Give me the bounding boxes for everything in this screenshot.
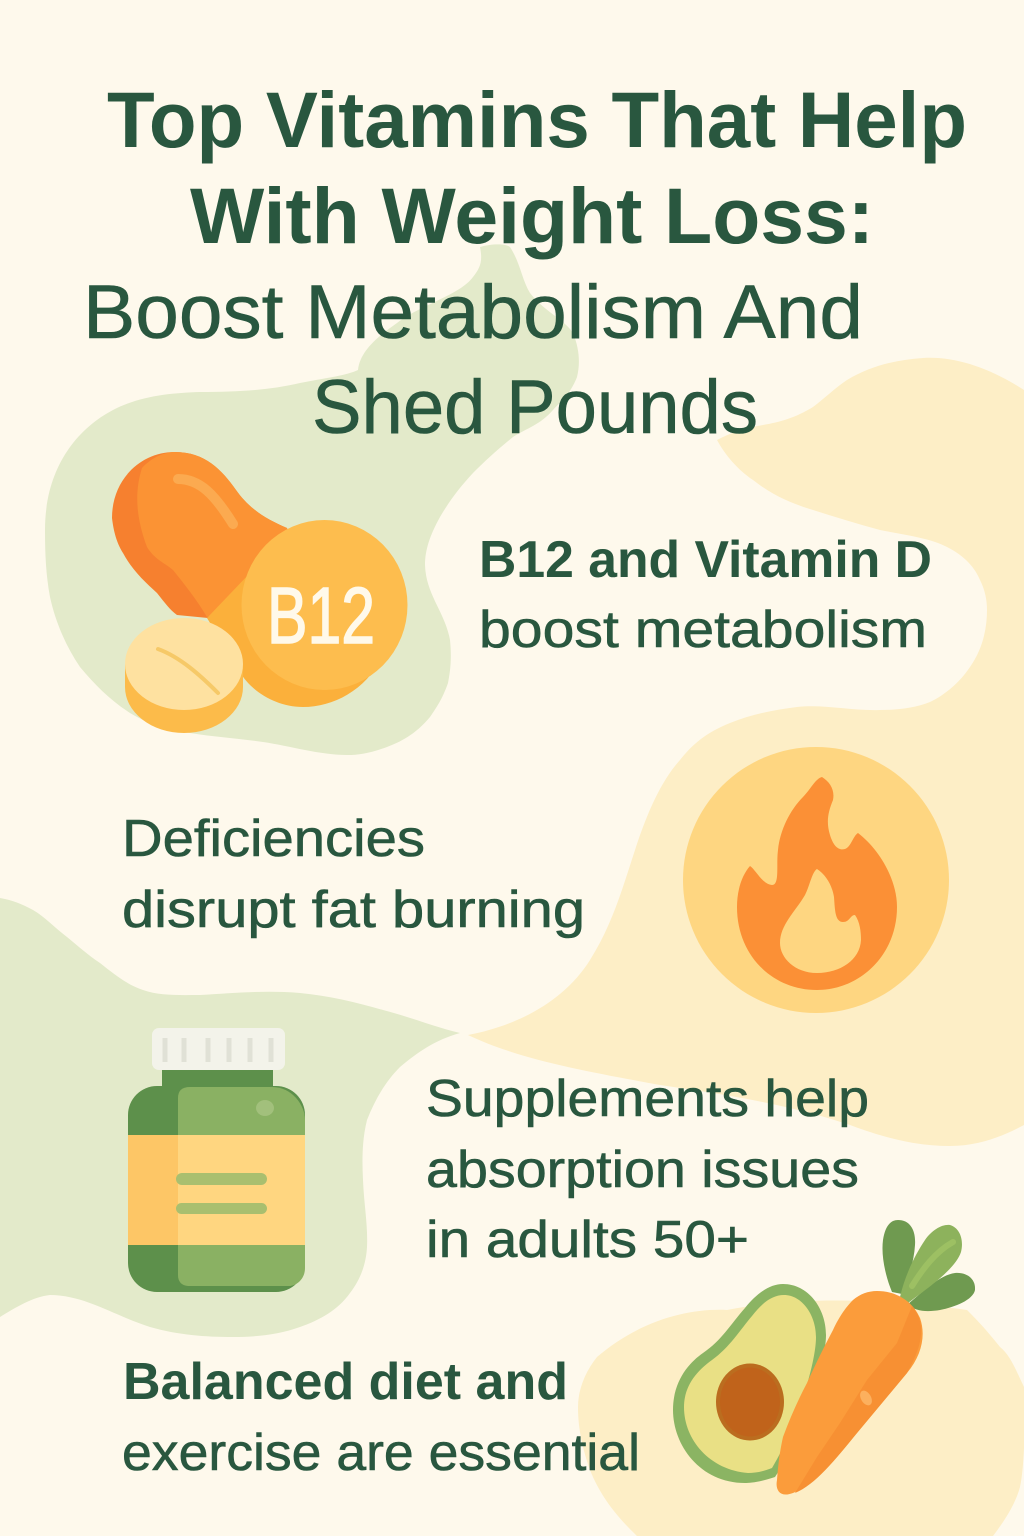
title	[83, 75, 967, 450]
B12 tablet	[207, 520, 408, 707]
carrot leaves	[882, 1220, 975, 1311]
text: balanced diet: Balanced diet and	[123, 1353, 568, 1411]
text: supplements: in adults 50+	[426, 1211, 749, 1269]
icon: carrot	[777, 1220, 975, 1495]
text: b12 and vitamin d: boost metabolism	[479, 601, 927, 659]
title: Top Vitamins That Help	[107, 75, 967, 164]
text: supplements: absorption issues	[426, 1141, 859, 1199]
text: balanced diet: exercise are essential	[122, 1424, 640, 1482]
capsule	[112, 452, 300, 618]
title: Boost Metabolism And	[83, 270, 863, 355]
icon: flame	[683, 747, 949, 1013]
icon: vitamin capsule and tablets	[112, 452, 408, 733]
text: supplements: Supplements help	[426, 1070, 869, 1128]
title: Shed Pounds	[312, 365, 758, 450]
icon: supplement bottle	[128, 1028, 305, 1292]
text: supplements	[426, 1070, 869, 1269]
carrot body	[777, 1291, 923, 1495]
small tablet	[125, 618, 243, 733]
text: b12 and vitamin d: B12 and Vitamin D	[479, 531, 932, 589]
text: balanced diet	[122, 1353, 640, 1482]
icon: avocado	[673, 1284, 826, 1483]
text: deficiencies: disrupt fat burning	[122, 881, 585, 939]
title: With Weight Loss:	[190, 171, 874, 260]
text: deficiencies: Deficiencies	[122, 810, 425, 868]
text: deficiencies	[122, 810, 585, 939]
B12 tablet: B12	[267, 571, 375, 660]
text: b12 and vitamin d	[479, 531, 932, 659]
